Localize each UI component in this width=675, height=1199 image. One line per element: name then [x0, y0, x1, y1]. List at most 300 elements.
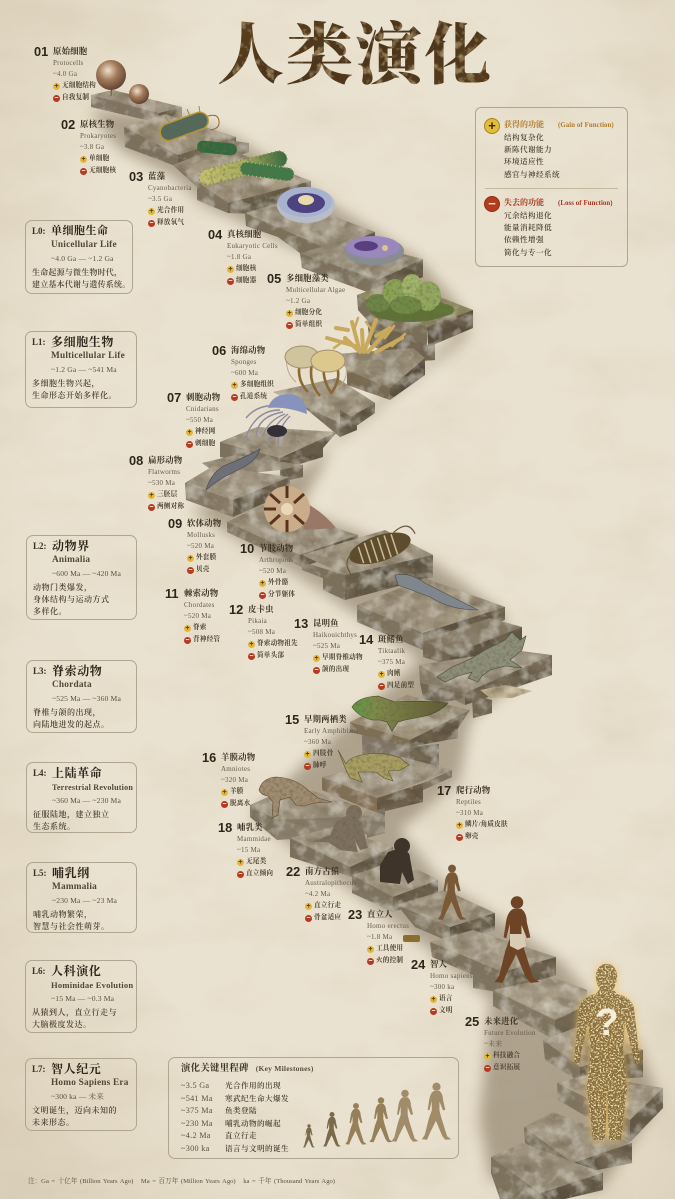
stage 22 label: ~4.2 Ma — [305, 890, 330, 898]
panel: L1 multicellular life: 多细胞生物 — [51, 335, 114, 349]
stage 10 label: 节肢动物 — [259, 544, 293, 553]
stage 03 label: 释放氧气 — [157, 219, 184, 226]
04 eukaryotic cell dish — [277, 187, 335, 223]
stage 12 label: − — [249, 652, 254, 660]
18 sitting ape — [312, 805, 368, 852]
milestone rows: 寒武纪生命大爆发 — [225, 1094, 289, 1102]
stage 15 label: 肺呼 — [313, 762, 327, 769]
milestone rows — [181, 1081, 289, 1152]
panel: L7 homo sapiens era: 未来形态。 — [32, 1118, 74, 1127]
stage 24 label: 文明 — [439, 1007, 453, 1014]
stage 17 label: Reptiles — [456, 798, 481, 806]
stage 25 label: Future Evolution — [484, 1029, 536, 1037]
panel: gain and loss legend: 获得的功能 (Gain of Function) — [504, 120, 614, 129]
panel: L6 hominidae evolution: 从猿到人，直立行走与 — [32, 1008, 117, 1017]
16 reptile — [338, 750, 409, 782]
gain list — [504, 133, 560, 179]
stage 06 label: Sponges — [231, 358, 256, 366]
stage 13 label: 早期脊椎动物 — [322, 654, 363, 661]
stage 23 label: − — [368, 958, 373, 964]
stage 06 label: − — [232, 394, 237, 400]
stage 09 label: 09 — [168, 516, 182, 531]
milestone rows: ~3.5 Ga — [181, 1081, 209, 1090]
panel: L4 terrestrial revolution: ~360 Ma — ~230 Ma — [52, 796, 121, 805]
panel: L0 unicellular life — [25, 220, 133, 294]
stage 08 label: 两侧对称 — [157, 503, 184, 510]
panel: L7 homo sapiens era: 文明诞生，迈向未知的 — [32, 1106, 117, 1115]
stage 03 label: ~3.5 Ga — [148, 195, 172, 203]
panel: L7 homo sapiens era — [25, 1058, 137, 1131]
stage 10 label: 外骨骼 — [268, 579, 288, 586]
stage 02 label: + — [81, 156, 86, 162]
panel: L0 unicellular life: 建立基本代谢与遗传系统。 — [32, 280, 130, 289]
stage 07 label: 刺细胞 — [195, 440, 215, 447]
panel: L7 homo sapiens era: 智人纪元 — [51, 1062, 101, 1076]
stage 17 label: 鳞片/角质皮肤 — [465, 821, 508, 828]
stage 11 label: 背神经管 — [193, 636, 220, 643]
stage 17 label: − — [457, 834, 462, 840]
stage 06 label: 海绵动物 — [231, 346, 265, 355]
stage 12 label: 皮卡虫 — [248, 605, 274, 614]
02 prokaryote capsule — [158, 106, 219, 143]
panel: L2 animalia: 身体结构与运动方式 — [33, 595, 110, 604]
panel: L2 animalia — [26, 535, 137, 620]
stage 14 label: 肉鳍 — [387, 670, 401, 677]
stage 12 label: + — [249, 640, 254, 648]
panel: L2 animalia: ~600 Ma — ~420 Ma — [52, 569, 121, 578]
stage 22 label: 直立行走 — [314, 902, 341, 909]
stage 06 label: 孔道系统 — [240, 393, 267, 400]
stage 05 label: 05 — [267, 271, 281, 286]
16b furry amniote — [259, 777, 332, 818]
stage 01 label: + — [54, 82, 59, 90]
milestone rows: ~300 ka — [181, 1144, 210, 1152]
milestone rows: 光合作用的出现 — [225, 1081, 281, 1090]
panel: L0 unicellular life: ~4.0 Ga — ~1.2 Ga — [51, 254, 114, 263]
stage 14 label: Tiktaalik — [378, 647, 405, 655]
stage 24 label: 智人 — [430, 960, 447, 969]
stage 08 label: ~530 Ma — [148, 479, 175, 487]
stage 14 label: ~375 Ma — [378, 658, 405, 666]
milestone rows: ~230 Ma — [181, 1118, 213, 1128]
stage 01 label: 01 — [34, 44, 48, 59]
loss list: 冗余结构退化 — [504, 211, 552, 220]
panel: L3 chordata: 脊椎与颌的出现， — [33, 708, 101, 717]
panel: gain and loss legend: 失去的功能 (Loss of Function) — [504, 198, 613, 207]
panel: L3 chordata: Chordata — [52, 680, 92, 690]
coral — [327, 318, 405, 352]
stage 08 label: 三胚层 — [157, 491, 177, 498]
stage 04 label — [208, 227, 278, 285]
stage 13 label: 昆明鱼 — [313, 619, 339, 628]
stage 16 label: ~320 Ma — [221, 776, 248, 784]
08 flatworm — [206, 449, 260, 490]
15 early amphibian — [352, 696, 448, 731]
stage 11 label: 脊索 — [193, 624, 207, 631]
stage 11 label: − — [185, 636, 190, 644]
panel: L0 unicellular life: Unicellular Life — [51, 240, 117, 250]
panel: L5 mammalia: 哺乳动物繁荣， — [33, 910, 92, 919]
panel: L4 terrestrial revolution: 上陆革命 — [52, 766, 102, 780]
stage 13 label — [294, 616, 363, 674]
stage 04 label: + — [228, 266, 233, 272]
milestone evolution figures — [303, 1083, 451, 1148]
stage 05 label: ~1.2 Ga — [286, 297, 310, 305]
stage 16 label: 16 — [202, 750, 216, 765]
stage 01 label: 原始细胞 — [53, 47, 87, 56]
stage 02 label — [61, 117, 116, 175]
stage 09 label: + — [188, 554, 193, 562]
panel: L3 chordata: ~525 Ma — ~360 Ma — [52, 694, 121, 703]
stage 07 label: 07 — [167, 390, 181, 405]
panel: L1 multicellular life: 生命形态开始多样化。 — [32, 391, 117, 400]
stage 09 label: − — [188, 566, 193, 574]
stage 13 label: + — [314, 654, 319, 662]
stage 07 label — [167, 390, 220, 448]
panel: L0 unicellular life: 单细胞生命 — [51, 225, 108, 237]
stage 01 label: − — [54, 94, 59, 102]
stage 03 label: 03 — [129, 169, 143, 184]
stage 04 label: 细胞器 — [236, 277, 256, 284]
stairs — [91, 90, 663, 1199]
panel: L7 homo sapiens era: L7: — [32, 1064, 46, 1074]
loss list: 依赖性增强 — [504, 235, 544, 244]
loss list: 简化与专一化 — [504, 248, 552, 257]
stage 05 label: + — [287, 310, 292, 316]
stage 04 label: 04 — [208, 227, 222, 242]
stage 08 label: 08 — [129, 453, 143, 468]
stage 12 label: 12 — [229, 602, 243, 617]
stage 15 label: Early Amphibians — [304, 727, 359, 735]
panel: L3 chordata: L3: — [33, 666, 46, 676]
stage 24 label: − — [431, 1008, 436, 1014]
stage 04 label: 细胞核 — [236, 265, 256, 272]
stage 14 label: 四足前型 — [387, 682, 414, 689]
stage 25 label: 未来进化 — [484, 1017, 518, 1026]
stage 22 label: 22 — [286, 864, 300, 879]
stage 18 label: ~15 Ma — [237, 846, 260, 854]
stage 17 label: 爬行动物 — [456, 786, 490, 795]
stage 18 label: 直立倾向 — [246, 870, 273, 877]
05a purple cell dish — [344, 236, 404, 265]
stage 02 label: − — [81, 168, 86, 174]
panel: L3 chordata: 脊索动物 — [52, 664, 102, 678]
23 tool — [403, 935, 420, 942]
stage 23 label: 火的控制 — [376, 957, 403, 964]
stage 16 label: + — [222, 788, 227, 796]
stage 22 label — [286, 864, 356, 922]
stage 10 label: 10 — [240, 541, 254, 556]
stage 01 label: ~4.0 Ga — [53, 70, 77, 78]
panel: L4 terrestrial revolution — [26, 762, 137, 833]
stage 24 label: ~300 ka — [430, 983, 454, 991]
25 future figure — [574, 964, 640, 1140]
stage 08 label: 扁形动物 — [148, 456, 182, 465]
stage 10 label: − — [260, 592, 265, 598]
panel: L7 homo sapiens era: ~300 ka — 未来 — [51, 1092, 104, 1101]
stage 18 label: 哺乳类 — [237, 823, 263, 832]
stage 07 label: 刺胞动物 — [186, 393, 220, 402]
stage 25 label: + — [485, 1052, 490, 1060]
stage 18 label: 18 — [218, 820, 232, 835]
stage 05 label: 多细胞藻类 — [286, 274, 329, 283]
stage 10 label: + — [260, 580, 265, 586]
milestone rows: 直立行走 — [225, 1131, 257, 1140]
stage 02 label: 原核生物 — [80, 120, 114, 129]
panel: L6 hominidae evolution: 大脑极度发达。 — [32, 1020, 92, 1029]
panel: L1 multicellular life: ~1.2 Ga — ~541 Ma — [51, 365, 117, 374]
stage 14 label: 斑鳍鱼 — [378, 635, 404, 644]
panel: L1 multicellular life — [25, 331, 137, 408]
panel: L2 animalia: 动物界 — [52, 539, 90, 553]
stage 09 label: Mollusks — [187, 531, 215, 539]
panel: L7 homo sapiens era: Homo Sapiens Era — [51, 1078, 129, 1088]
stage 12 label: Pikaia — [248, 617, 267, 625]
panel: L4 terrestrial revolution: 生态系统。 — [33, 822, 76, 831]
stage 25 label — [465, 1014, 536, 1072]
stage 17 label — [437, 783, 508, 841]
stage 22 label: 南方古猿 — [305, 867, 339, 876]
stage 16 label: Amniotes — [221, 765, 250, 773]
stage 02 label: Prokaryotes — [80, 132, 116, 140]
panel: L1 multicellular life: L1: — [32, 337, 46, 347]
stage 14 label — [359, 632, 414, 690]
milestone rows: 哺乳动物的崛起 — [225, 1118, 281, 1128]
stage 02 label: ~3.8 Ga — [80, 143, 104, 151]
icon: loss minus — [484, 196, 500, 212]
milestone rows: ~375 Ma — [181, 1106, 213, 1115]
stage 08 label: + — [149, 492, 154, 498]
panel: L2 animalia: 多样化。 — [33, 607, 67, 616]
stage 15 label: 四肢骨 — [313, 750, 333, 757]
stage 15 label: ~360 Ma — [304, 738, 331, 746]
stage 16 label: 脱离水 — [230, 800, 250, 807]
stage 07 label: + — [187, 428, 192, 436]
milestone rows: ~4.2 Ma — [181, 1131, 211, 1140]
stage 17 label: 17 — [437, 783, 451, 798]
stage 14 label: + — [379, 670, 384, 678]
stage 17 label: + — [457, 822, 462, 828]
panel: gain and loss legend — [475, 107, 628, 267]
stage 25 label: − — [485, 1064, 490, 1072]
stage 25 label: ~未来 — [484, 1040, 503, 1048]
title: 人类演化 — [217, 2, 493, 98]
stage 13 label: ~525 Ma — [313, 642, 340, 650]
stage 15 label: + — [305, 750, 310, 758]
stage 05 label: 细胞分化 — [295, 309, 322, 316]
panel: L5 mammalia: ~230 Ma — ~23 Ma — [52, 896, 117, 905]
stage 24 label: 24 — [411, 957, 425, 972]
stage 11 label — [165, 586, 220, 644]
stage 18 label: − — [238, 870, 243, 878]
stage 01 label: 无细胞结构 — [62, 82, 96, 89]
stage 23 label: + — [368, 946, 373, 952]
stage 13 label: 颌的出现 — [322, 666, 349, 673]
panel: L0 unicellular life: 生命起源与微生物时代， — [32, 268, 122, 277]
stage 10 label — [240, 541, 295, 599]
stage 15 label: 15 — [285, 712, 299, 727]
stage 02 label: 无细胞核 — [89, 167, 116, 174]
milestone rows: ~541 Ma — [181, 1094, 213, 1102]
stage 18 label: Mammidae — [237, 835, 271, 843]
stage 07 label: 神经网 — [195, 428, 215, 435]
stage 13 label: − — [314, 666, 319, 674]
panel: L5 mammalia: Mammalia — [52, 882, 97, 892]
stage 23 label: Homo erectus — [367, 922, 409, 930]
panel: L5 mammalia — [26, 862, 137, 933]
stage 16 label: 羊膜动物 — [221, 753, 255, 762]
milestone rows: 语言与文明的诞生 — [225, 1144, 289, 1152]
07 jellyfish — [246, 394, 307, 444]
stage 12 label: 简单头部 — [257, 652, 284, 659]
stage 01 label: Protocells — [53, 59, 84, 67]
stage 25 label: 科技融合 — [493, 1052, 520, 1059]
stage 18 label: + — [238, 858, 243, 866]
24 homo sapiens — [495, 896, 539, 983]
stage 04 label: ~1.8 Ga — [227, 253, 251, 261]
stage 03 label: − — [149, 220, 154, 226]
stage 23 label — [348, 907, 409, 965]
gain list: 环境适应性 — [504, 157, 544, 166]
panel: L1 multicellular life: 多细胞生物兴起， — [32, 379, 100, 388]
panel: L2 animalia: L2: — [33, 541, 46, 551]
panel: L5 mammalia: L5: — [33, 868, 46, 878]
stage 11 label: ~520 Ma — [184, 612, 211, 620]
stage 12 label: 脊索动物祖先 — [257, 640, 298, 647]
03 cyanobacteria filaments — [196, 140, 295, 187]
stage 16 label: 羊膜 — [230, 788, 244, 795]
01 protocell spheres — [96, 60, 149, 104]
icon: loss minus: − — [488, 196, 496, 211]
stage 17 label: ~310 Ma — [456, 809, 483, 817]
stage 06 label: ~600 Ma — [231, 369, 258, 377]
stage 22 label: + — [306, 902, 311, 910]
11-12 fish lizard — [395, 574, 478, 610]
stage 10 label: 分节躯体 — [268, 591, 295, 598]
panel: L4 terrestrial revolution: L4: — [33, 768, 46, 778]
22 australopithecus — [438, 865, 466, 920]
stage 15 label: − — [305, 762, 310, 770]
footnote: 注：Ga = 十亿年 (Billion Years Ago) Ma = 百万年 (Million Years Ago) ka = 千年 (Thousand Years Ago) — [28, 1178, 335, 1185]
stage 05 label: Multicellular Algae — [286, 286, 345, 294]
stage 04 label: − — [228, 278, 233, 284]
stage 01 label — [34, 44, 96, 102]
panel: L5 mammalia: 智慧与社会性萌芽。 — [33, 922, 110, 931]
stage 03 label: 蓝藻 — [148, 172, 165, 181]
stage 09 label: 外套膜 — [196, 554, 216, 561]
stage 17 label: 卵壳 — [465, 833, 479, 840]
stage 09 label — [168, 516, 221, 574]
milestone rows: 鱼类登陆 — [225, 1106, 257, 1115]
panel: L0 unicellular life: L0: — [32, 226, 46, 236]
panel: L1 multicellular life: Multicellular Life — [51, 351, 125, 361]
panel: L4 terrestrial revolution: 征服陆地，建立独立 — [33, 810, 110, 819]
stair cast shadow — [90, 110, 660, 1190]
stage 10 label: Arthropods — [259, 556, 293, 564]
loss list — [504, 211, 552, 257]
stage 09 label: 软体动物 — [187, 519, 221, 528]
panel: key milestones — [168, 1057, 459, 1159]
stage 11 label: Chordates — [184, 601, 215, 609]
panel: L6 hominidae evolution: L6: — [32, 966, 46, 976]
stage 03 label — [129, 169, 192, 227]
stage 02 label: 02 — [61, 117, 75, 132]
stage 07 label: ~550 Ma — [186, 416, 213, 424]
stage 12 label: ~508 Ma — [248, 628, 275, 636]
stage 04 label: 真核细胞 — [227, 230, 261, 239]
stage 07 label: − — [187, 440, 192, 448]
panel: L2 animalia: Animalia — [52, 555, 90, 565]
gain list: 感官与神经系统 — [504, 170, 560, 179]
stage 14 label: − — [379, 682, 384, 690]
05 multicellular algae — [366, 274, 454, 322]
stage 25 label: 意识拓展 — [493, 1064, 520, 1071]
panel: L6 hominidae evolution: ~15 Ma — ~0.3 Ma — [51, 994, 114, 1003]
stage 11 label: 棘索动物 — [184, 589, 218, 598]
stage 09 label: ~520 Ma — [187, 542, 214, 550]
panel: L2 animalia: 动物门类爆发， — [33, 583, 92, 592]
14 tiktaalik — [437, 632, 526, 682]
stage 06 label — [212, 343, 274, 401]
stage 12 label — [229, 602, 298, 660]
stage 18 label — [218, 820, 273, 878]
stage 23 label: 工具使用 — [376, 945, 403, 952]
stage 08 label: − — [149, 504, 154, 510]
stage 09 label: 贝壳 — [196, 566, 210, 573]
panel: L5 mammalia: 哺乳纲 — [52, 866, 90, 880]
25 future figure: ? — [595, 1002, 619, 1044]
stage 06 label: 06 — [212, 343, 226, 358]
stage 03 label: + — [149, 208, 154, 214]
panel: L3 chordata — [26, 660, 137, 733]
panel: L6 hominidae evolution: Hominidae Evolution — [51, 980, 133, 990]
stage 04 label: Eukaryotic Cells — [227, 242, 278, 250]
stage 24 label: 语言 — [439, 995, 453, 1002]
stage 24 label — [411, 957, 473, 1015]
stage 11 label: 11 — [165, 586, 179, 601]
stage 23 label: ~1.8 Ma — [367, 933, 392, 941]
stage 22 label: − — [306, 914, 311, 922]
icon: gain plus: + — [488, 118, 496, 133]
stage 05 label — [267, 271, 345, 329]
stage 23 label: 直立人 — [367, 910, 393, 919]
stage 22 label: Australopithecus — [305, 879, 356, 887]
stage 24 label: + — [431, 996, 436, 1002]
stage 06 label: + — [232, 382, 237, 388]
stage 15 label — [285, 712, 359, 770]
panel: L6 hominidae evolution: 人科演化 — [51, 964, 101, 978]
stage 06 label: 多细胞组织 — [240, 381, 274, 388]
stage 10 label: ~520 Ma — [259, 567, 286, 575]
stage 25 label: 25 — [465, 1014, 479, 1029]
stage 08 label — [129, 453, 184, 511]
gain list: 新陈代谢能力 — [504, 145, 552, 154]
06 sponge — [285, 346, 346, 396]
stage 13 label: 13 — [294, 616, 308, 631]
icon: gain plus — [484, 118, 500, 134]
19 dark ape — [380, 838, 414, 884]
loss list: 能量消耗降低 — [504, 223, 552, 232]
stage 05 label: 简单组织 — [295, 321, 322, 328]
stage 01 label: 自我复制 — [62, 94, 89, 101]
stage 02 label: 单细胞 — [89, 155, 109, 162]
gain list: 结构复杂化 — [504, 133, 544, 142]
stage 11 label: + — [185, 624, 190, 632]
panel: L4 terrestrial revolution: Terrestrial Revolution — [52, 783, 133, 792]
stage 08 label: Flatworms — [148, 468, 180, 476]
stage 16 label — [202, 750, 255, 808]
panel: key milestones: 演化关键里程碑 (Key Milestones) — [181, 1064, 314, 1074]
